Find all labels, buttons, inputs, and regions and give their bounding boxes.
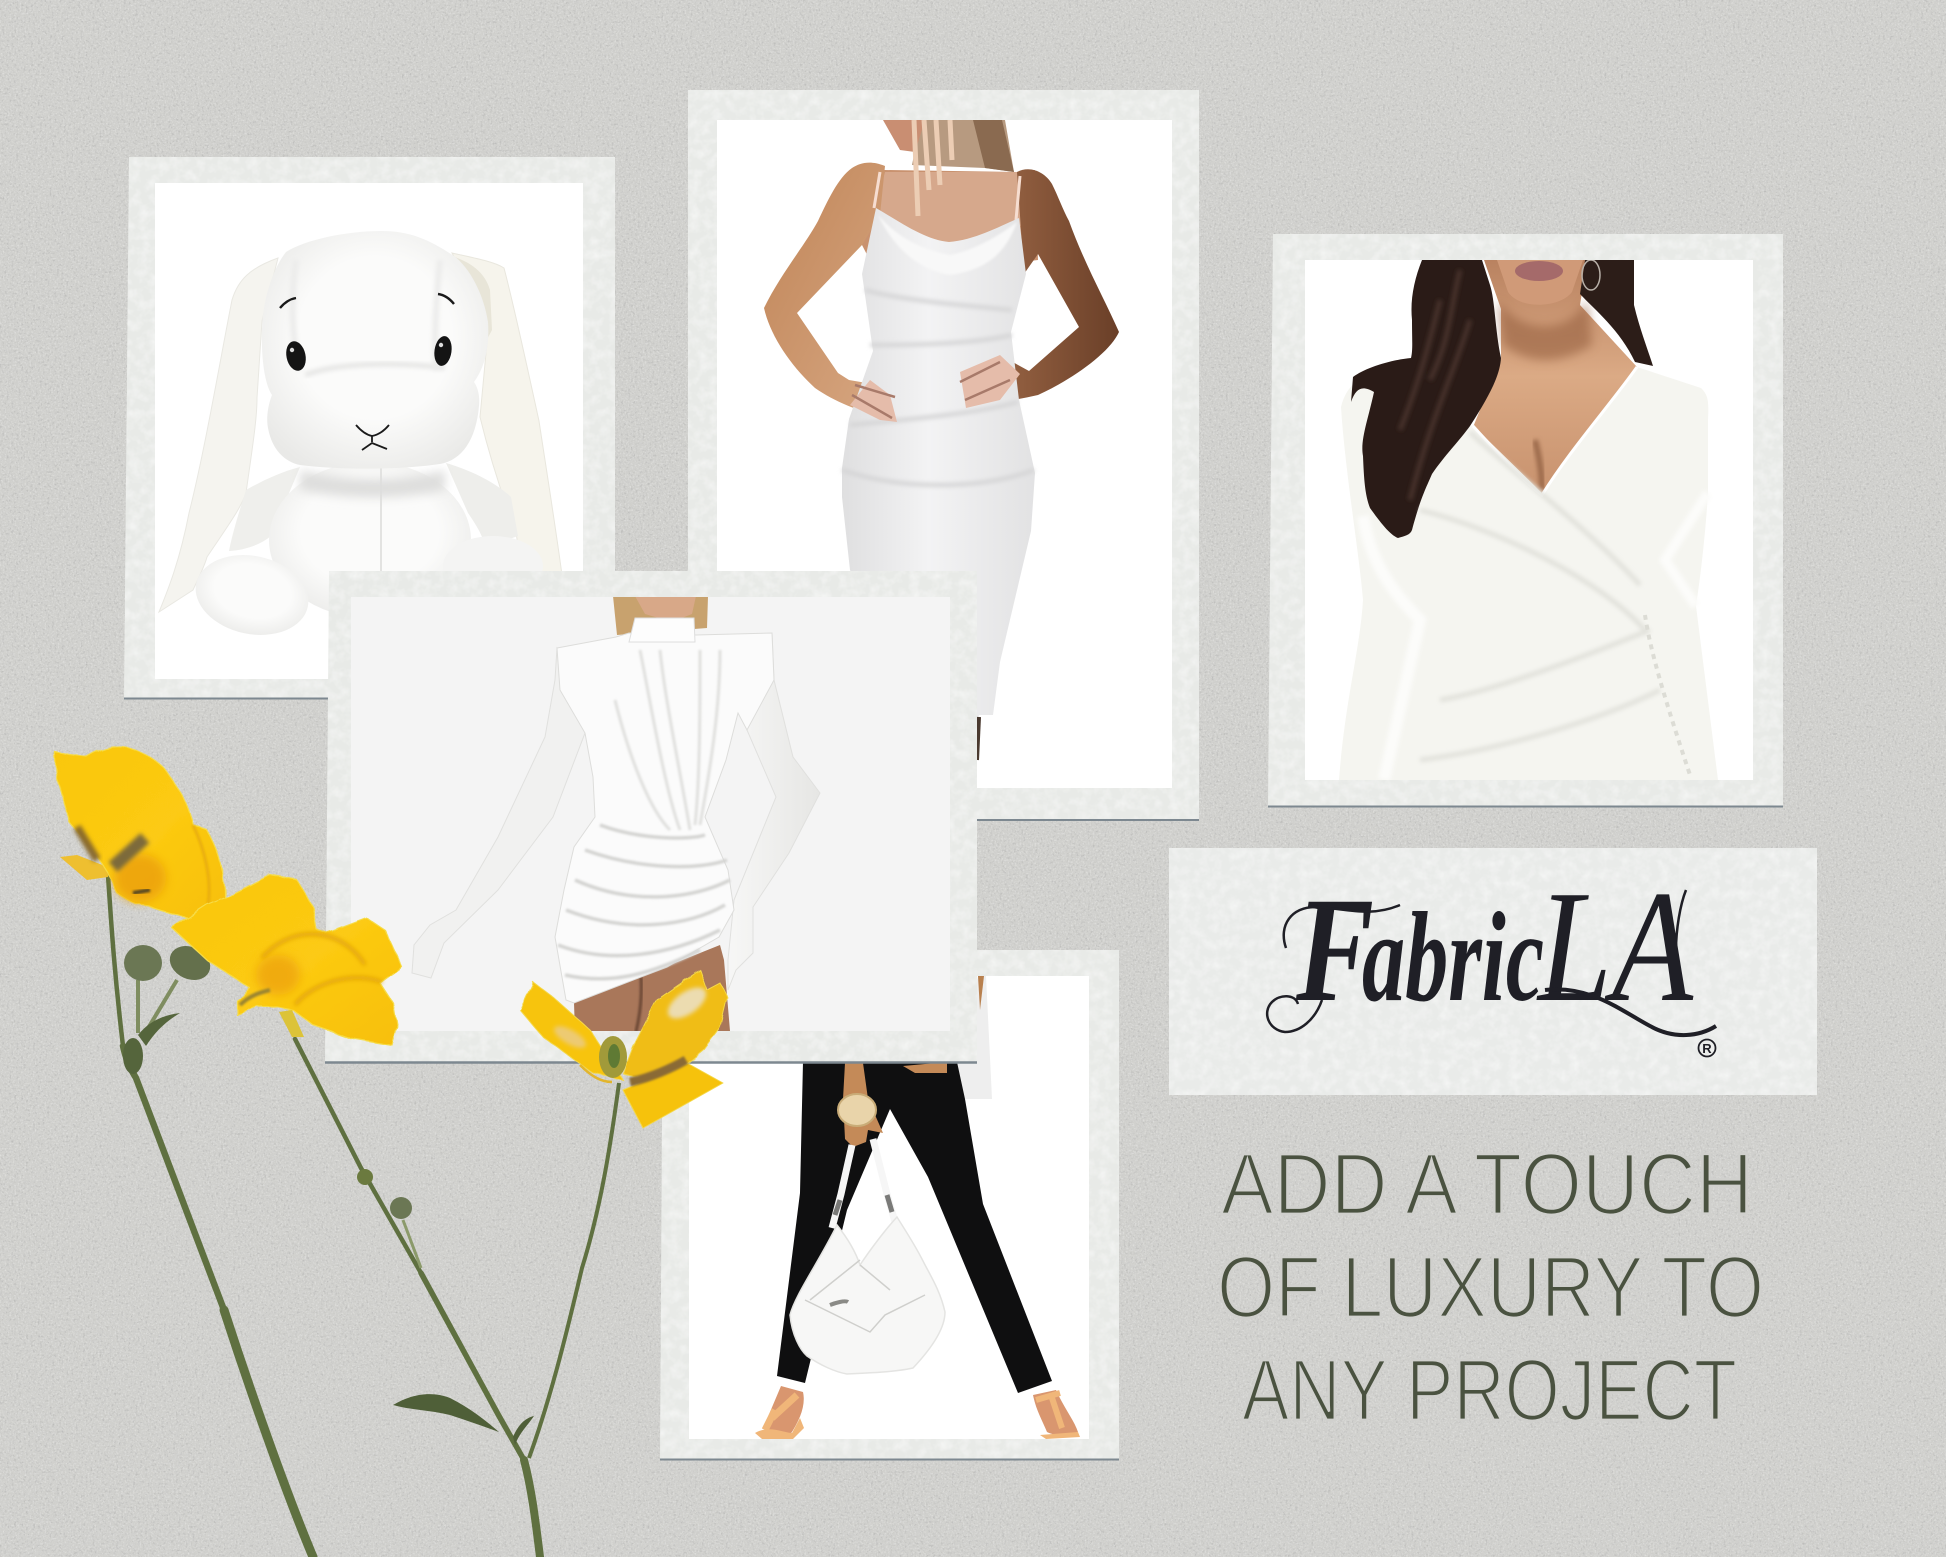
FabricLA logo: F	[1295, 867, 1374, 1033]
left sleeve and glove	[412, 648, 590, 978]
dress photo frame	[688, 90, 1199, 819]
flower: right	[520, 970, 727, 1128]
FabricLA logo: abric	[1362, 886, 1544, 1028]
woman in slip dress	[764, 120, 1119, 790]
stem: middle flower	[295, 1039, 540, 1557]
model in white ruched dress and gloves	[412, 596, 820, 1032]
stem: right flower	[529, 1083, 619, 1458]
right sleeve and glove	[728, 680, 820, 990]
bunny photo frame	[124, 157, 615, 698]
woman in wrap dress	[1339, 260, 1718, 780]
tagline heading	[1217, 1136, 1764, 1439]
panel: gathered white mini dress photo	[325, 571, 977, 1062]
panel: black leggings and white bag photo	[660, 950, 1119, 1460]
leggings photo frame	[660, 950, 1119, 1459]
FabricLA logo	[1267, 857, 1716, 1056]
logo card background	[1169, 848, 1817, 1095]
panel: bunny plush photo	[124, 157, 615, 698]
bunny plush toy	[159, 231, 562, 645]
mini dress photo frame	[325, 571, 977, 1062]
FabricLA logo: R	[1702, 1041, 1712, 1056]
tagline heading: ADD A TOUCH	[1221, 1136, 1753, 1233]
panel: velvet wrap dress photo	[1268, 234, 1783, 806]
wrap dress photo frame	[1268, 234, 1783, 806]
panel: logo card	[1169, 848, 1817, 1095]
figure with leggings, bag and sandals	[755, 976, 1080, 1440]
tagline heading: OF LUXURY TO	[1217, 1239, 1764, 1336]
flower: top left	[55, 747, 225, 920]
stem: left flower	[108, 875, 313, 1557]
buds and leaves	[123, 940, 534, 1445]
tagline heading: ANY PROJECT	[1242, 1342, 1737, 1439]
flower: middle	[172, 875, 402, 1045]
dress body	[555, 633, 774, 1003]
illustration: yellow flowers with stems	[55, 747, 727, 1557]
panel: satin slip dress photo	[688, 90, 1199, 820]
FabricLA logo: LA	[1536, 857, 1694, 1035]
